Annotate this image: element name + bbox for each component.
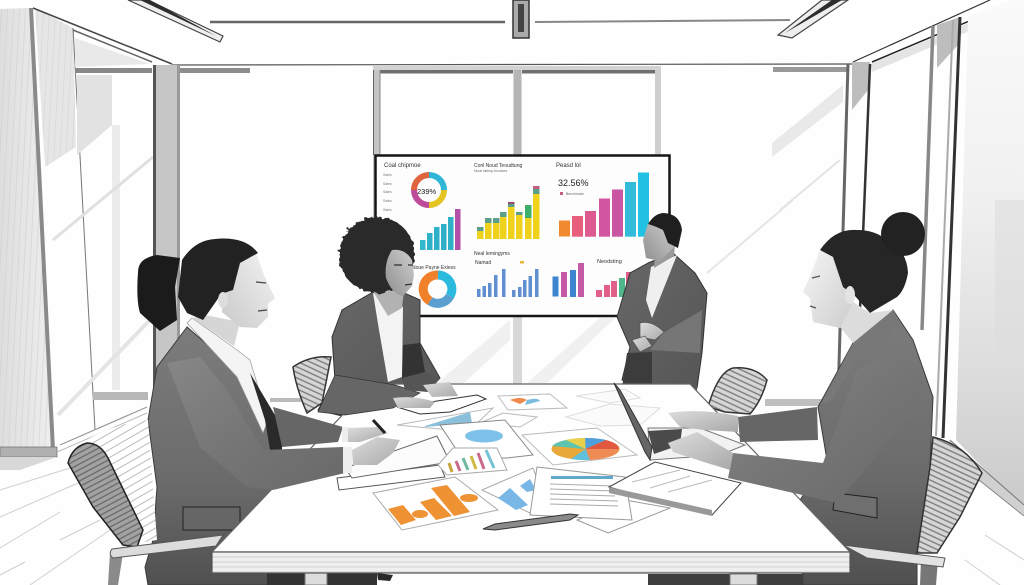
notebook on table [609, 462, 741, 516]
paper: orange bar chart [373, 477, 498, 530]
person: presenting man [617, 213, 707, 402]
facial features [256, 282, 267, 311]
person: woman on right, head and arms [668, 212, 925, 503]
far sleeve [273, 407, 343, 447]
paper: lower sheet [577, 500, 670, 533]
top left chart labels: Sales [383, 173, 392, 177]
top left chart labels: Sales [383, 208, 392, 212]
face [386, 250, 414, 296]
lower middle paired bar charts: Namad [475, 260, 491, 266]
under-table shadows and legs [267, 572, 803, 585]
afro woman's arm and hands [318, 372, 458, 415]
near sleeve [728, 355, 920, 503]
hair bun [881, 212, 925, 256]
ear [845, 286, 855, 304]
hands [640, 322, 664, 340]
paper: line chart [397, 408, 493, 430]
left pillar and window [0, 8, 180, 470]
stacked bar chart: Conl Noud Teoudtung [474, 163, 522, 169]
lower right bar charts [552, 259, 632, 297]
far sleeve [738, 407, 818, 442]
headline metric and rising bars: 32.56% [558, 178, 589, 188]
face [222, 250, 275, 328]
stacked bar chart [474, 163, 540, 239]
hair [648, 213, 682, 248]
shirt [373, 293, 403, 382]
neck [654, 245, 675, 268]
upper hand [668, 411, 738, 432]
neck [840, 300, 893, 343]
lower middle paired bar charts: Neal Iemingyms [474, 251, 510, 257]
ceiling with lights [128, 0, 848, 42]
lower right bar charts: Neodsting [597, 259, 622, 265]
back right chair [708, 368, 767, 414]
paper: pie sketch [498, 394, 567, 410]
jacket body [800, 310, 933, 585]
pen [483, 514, 578, 530]
lower middle paired bar charts [474, 251, 538, 297]
headline metric and rising bars: Peasd lol [556, 163, 581, 169]
trousers and belt [622, 352, 652, 388]
shirt collar [187, 318, 268, 433]
lower hand [668, 432, 733, 470]
dark inner jacket [250, 373, 282, 450]
facial features [394, 265, 413, 285]
jacket pocket [183, 507, 240, 530]
person: woman on right, torso [800, 310, 933, 585]
near hand with pen [352, 437, 400, 465]
bar chart: top left [420, 209, 460, 250]
paper: lower sheet under report [337, 465, 445, 490]
headline metric and rising bars: Benchmark [566, 192, 584, 196]
floor planks [0, 468, 1024, 585]
wall dashboard screen [376, 156, 670, 316]
afro hair [339, 217, 415, 293]
facial features [810, 276, 820, 308]
top left chart labels: Coal chipmoe [384, 163, 421, 169]
headline metric and rising bars [556, 163, 649, 237]
stacked bar chart: Noue fabrup Invoices [474, 169, 507, 173]
ponytail [137, 255, 180, 331]
paper: report under writing hand [345, 436, 450, 478]
near sleeve [167, 357, 345, 490]
paper: text report [530, 467, 632, 520]
jacket pocket [833, 493, 877, 518]
forearm [650, 310, 702, 353]
conference table [212, 384, 850, 573]
donut chart: top left [414, 175, 444, 205]
face [803, 250, 852, 328]
hair [820, 230, 908, 313]
laptop [614, 383, 745, 460]
neck [192, 315, 240, 346]
back left chair [293, 357, 331, 413]
donut chart: lower left [423, 275, 452, 303]
neck [374, 285, 404, 316]
face [643, 223, 674, 261]
person: woman with afro hair [318, 217, 440, 418]
lapel [820, 310, 902, 405]
ear [218, 292, 228, 308]
paper: faint sheets [576, 389, 640, 403]
back window wall [172, 64, 853, 406]
paper: colourful bars [438, 448, 507, 475]
top left chart labels: Sales [383, 190, 392, 194]
jacket [617, 253, 707, 388]
top left chart labels [383, 163, 437, 212]
person: woman on left, torso [145, 327, 285, 585]
far hand [348, 427, 388, 442]
paper: multicolour pie [522, 428, 637, 465]
papers on table [337, 389, 670, 533]
paper: blue chart [482, 468, 545, 513]
paper: small round sketch [480, 413, 537, 427]
person: woman on left, head and arms [137, 239, 400, 490]
paper: blue pie [440, 420, 533, 458]
left chair [68, 420, 223, 585]
top left chart labels: Sales [383, 199, 392, 203]
lower left chart heading: Noue Payne Exiess [412, 265, 456, 271]
jacket [318, 292, 440, 418]
top left chart labels: Sales [383, 182, 392, 186]
jacket body [145, 327, 285, 585]
top left chart labels: 239% [417, 187, 437, 196]
hair [178, 239, 258, 320]
shirt [646, 255, 677, 318]
right windows [838, 0, 1024, 516]
right chair [843, 437, 982, 585]
clipboard under hands [397, 395, 486, 414]
